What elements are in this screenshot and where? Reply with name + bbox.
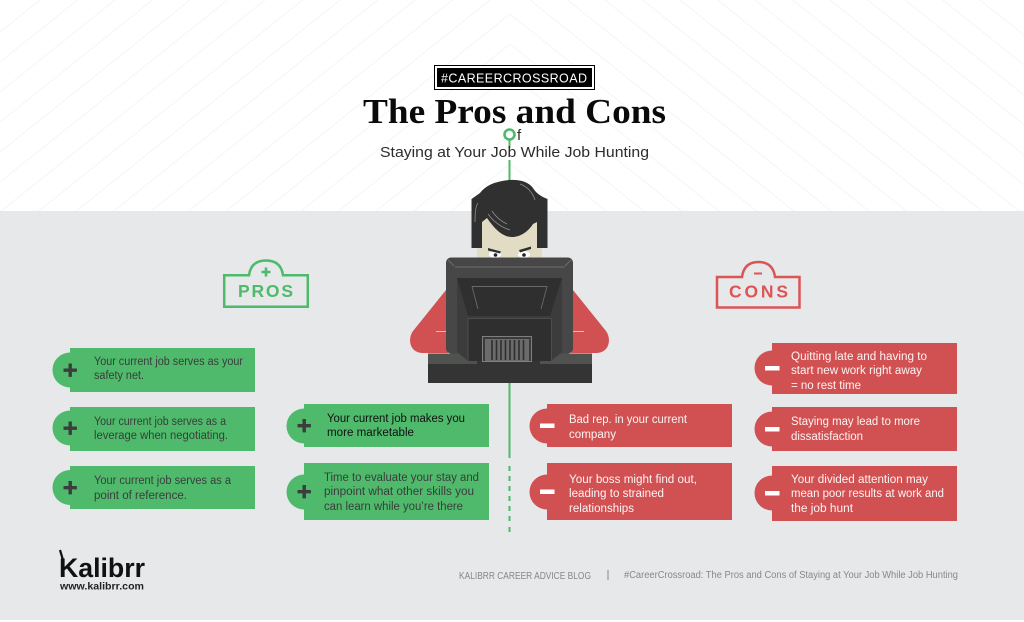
panel: con 5: Your divided attention may xyxy=(791,474,928,486)
heading: cons: CONS xyxy=(729,282,788,302)
panel: pro 1 xyxy=(52,348,255,392)
vent xyxy=(482,336,532,362)
panel: pro 3: point of reference. xyxy=(94,490,187,502)
panel: pro 5: pinpoint what other skills you xyxy=(324,486,474,498)
subtitle: f xyxy=(517,127,522,144)
panel: con 4: Staying may lead to more xyxy=(791,416,920,428)
heading: pros: PROS xyxy=(238,281,293,301)
panel: pro 2 xyxy=(52,407,255,451)
panel: pro 4: Your current job makes you xyxy=(327,413,465,425)
panel: con 3: = no rest time xyxy=(791,380,861,392)
left arm xyxy=(410,290,448,353)
panel: con 3: Quitting late and having to xyxy=(791,351,927,363)
panel: con 5: the job hunt xyxy=(791,503,854,515)
logo: Kalibrr: www.kalibrr.com xyxy=(59,580,144,592)
icon: location pin xyxy=(504,130,514,140)
panel: con 3: start new work right away xyxy=(791,365,922,377)
heading: cons xyxy=(717,262,800,308)
panel: pro 1: Your current job serves as your xyxy=(94,356,243,368)
panel: pro 5 xyxy=(286,463,489,520)
panel: con 2: Your boss might find out, xyxy=(569,474,697,486)
hashtag badge xyxy=(434,66,594,90)
footer: blog credit: #CareerCrossroad: The Pros and Cons of Staying at Your Job While Job Hunting xyxy=(624,570,958,581)
panel: pro 1: safety net. xyxy=(94,370,144,382)
panel: con 5 xyxy=(754,466,957,521)
illustration: person at computer xyxy=(410,180,609,383)
panel: con 1: Bad rep. in your current xyxy=(569,414,688,426)
panel: pro 4 xyxy=(286,404,489,447)
panel: con 2: leading to strained xyxy=(569,488,664,500)
panel: pro 3: Your current job serves as a xyxy=(94,475,232,487)
footer: blog credit xyxy=(459,570,958,582)
panel: con 5: mean poor results at work and xyxy=(791,488,944,500)
connector line: bottom xyxy=(508,383,510,532)
hair xyxy=(472,180,548,248)
panel: con 2: relationships xyxy=(569,503,634,515)
title: The Pros and Cons xyxy=(363,92,666,131)
desk xyxy=(428,354,592,383)
connector line: top xyxy=(508,139,510,181)
hashtag badge: #CAREERCROSSROAD xyxy=(441,72,587,86)
panel: con 4 xyxy=(754,407,957,451)
panel: pro 2: Your current job serves as a xyxy=(94,416,227,428)
panel: pro 2: leverage when negotiating. xyxy=(94,430,228,442)
panel: con 1: company xyxy=(569,429,616,441)
panel: con 2 xyxy=(530,463,732,520)
monitor xyxy=(446,258,573,364)
logo: Kalibrr: Kalibrr xyxy=(59,553,145,583)
panel: pro 5: can learn while you’re there xyxy=(324,501,463,513)
panel: pro 4: more marketable xyxy=(327,427,414,439)
subtitle xyxy=(380,127,649,161)
panel: con 4: dissatisfaction xyxy=(791,431,863,443)
panel: con 1 xyxy=(530,404,732,447)
panel: con 3 xyxy=(754,343,957,394)
right arm xyxy=(571,290,609,353)
footer: blog credit: KALIBRR CAREER ADVICE BLOG xyxy=(459,571,591,582)
heading: pros xyxy=(224,260,308,307)
panel: pro 5: Time to evaluate your stay and xyxy=(324,472,479,484)
panel: pro 3 xyxy=(52,466,255,509)
face xyxy=(477,215,542,259)
subtitle: Staying at Your Job While Job Hunting xyxy=(380,144,649,161)
